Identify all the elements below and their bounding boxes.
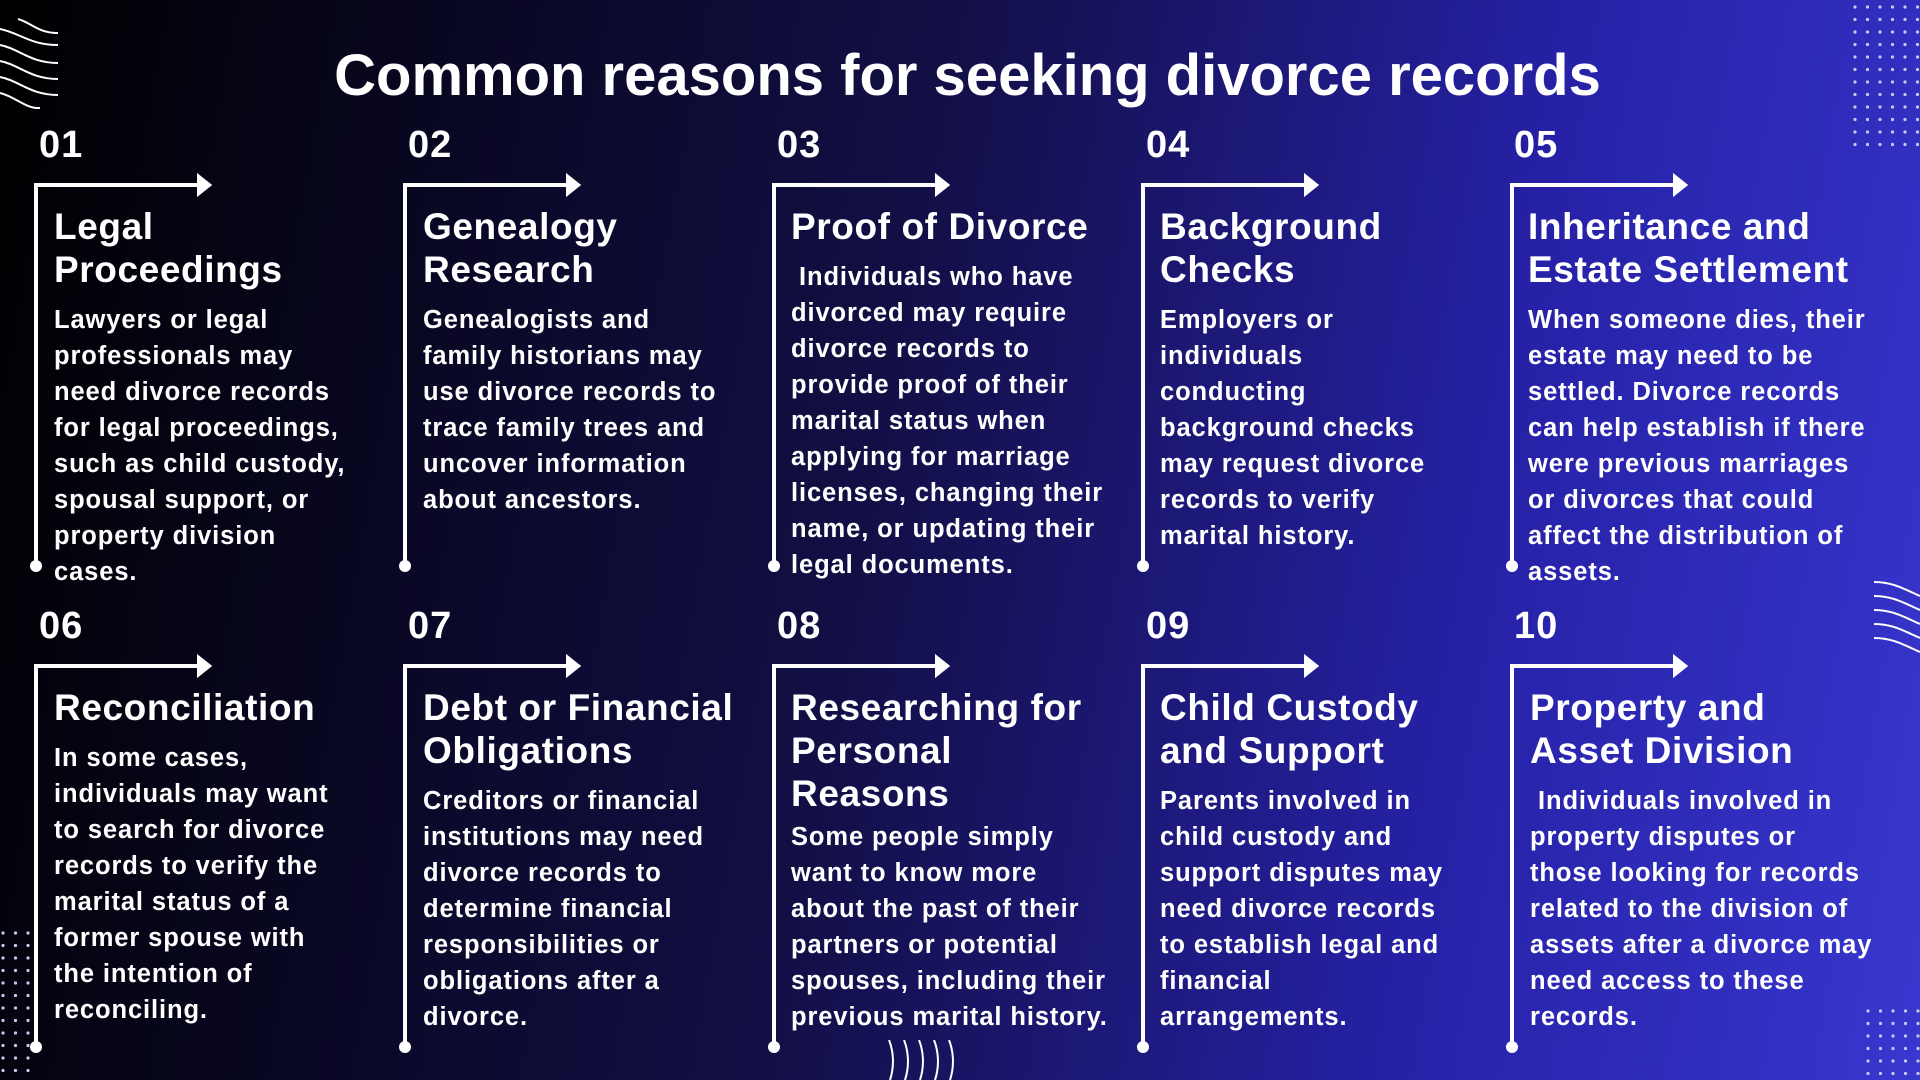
card 02: Genealogy <box>423 206 618 247</box>
card 01: professionals may <box>54 342 293 370</box>
card 02: uncover information <box>423 450 687 478</box>
card 04: conducting <box>1160 378 1306 406</box>
card 07: Creditors or financial <box>423 787 699 815</box>
card 01: Proceedings <box>54 249 283 290</box>
card 02: Research <box>423 249 594 290</box>
card 08: Researching for <box>791 687 1082 728</box>
card 02: Genealogists and <box>423 306 650 334</box>
card 04: individuals <box>1160 342 1303 370</box>
card 10: those looking for records <box>1530 859 1860 887</box>
card 10: records. <box>1530 1003 1638 1031</box>
text: 04 <box>1146 124 1190 166</box>
card 08: about the past of their <box>791 895 1079 923</box>
card 07: institutions may need <box>423 823 704 851</box>
card 02: family historians may <box>423 342 703 370</box>
card 04: may request divorce <box>1160 450 1425 478</box>
card 03: Proof of Divorce <box>791 206 1088 247</box>
card 03: divorce records to <box>791 335 1030 363</box>
card 09: and Support <box>1160 730 1384 771</box>
card 05: assets. <box>1528 558 1621 586</box>
card 03: Individuals who have <box>799 263 1073 291</box>
title: Common reasons for seeking divorce records <box>334 43 1601 108</box>
text: 02 <box>408 124 452 166</box>
numbers: 01 <box>39 124 83 166</box>
card 05: When someone dies, their <box>1528 306 1866 334</box>
card 09: child custody and <box>1160 823 1392 851</box>
card 08: Reasons <box>791 773 949 814</box>
card 01: property division <box>54 522 276 550</box>
card 09: need divorce records <box>1160 895 1436 923</box>
card 06: individuals may want <box>54 780 328 808</box>
card 03: licenses, changing their <box>791 479 1103 507</box>
card 08: Personal <box>791 730 952 771</box>
card 01: Lawyers or legal <box>54 306 268 334</box>
card 07: responsibilities or <box>423 931 660 959</box>
card 09 <box>1160 687 1443 1031</box>
card 06: marital status of a <box>54 888 289 916</box>
card 06: Reconciliation <box>54 687 315 728</box>
decoration: waves right <box>1874 581 1920 653</box>
card 06 <box>54 687 328 1024</box>
card 09: Child Custody <box>1160 687 1419 728</box>
card 05 <box>1528 206 1866 586</box>
text: 05 <box>1514 124 1558 166</box>
card 08: want to know more <box>791 859 1037 887</box>
card 10: need access to these <box>1530 967 1805 995</box>
card 01: need divorce records <box>54 378 330 406</box>
card 09: Parents involved in <box>1160 787 1411 815</box>
card 03: provide proof of their <box>791 371 1069 399</box>
card 10: assets after a divorce may <box>1530 931 1872 959</box>
card 10 <box>1530 687 1872 1031</box>
card 01 <box>54 206 345 586</box>
decoration: dot grid bottom-left <box>1 931 30 1072</box>
card 06: records to verify the <box>54 852 318 880</box>
card 09: financial <box>1160 967 1272 995</box>
card 04: Background <box>1160 206 1382 247</box>
card 04: marital history. <box>1160 522 1355 550</box>
card 04: Checks <box>1160 249 1295 290</box>
card 06: to search for divorce <box>54 816 325 844</box>
card 04 <box>1160 206 1425 550</box>
card 10: related to the division of <box>1530 895 1848 923</box>
card 05: were previous marriages <box>1528 450 1849 478</box>
card 07: Obligations <box>423 730 633 771</box>
card 08: spouses, including their <box>791 967 1106 995</box>
card 06: reconciling. <box>54 996 208 1024</box>
card 05: Inheritance and <box>1528 206 1810 247</box>
decoration: curves bottom <box>888 1040 954 1080</box>
card 01: for legal proceedings, <box>54 414 339 442</box>
card 01: spousal support, or <box>54 486 309 514</box>
card 04: records to verify <box>1160 486 1375 514</box>
card 06: In some cases, <box>54 744 248 772</box>
decoration: dot grid bottom-right <box>1866 1009 1920 1076</box>
text: 07 <box>408 605 452 647</box>
card 08: partners or potential <box>791 931 1058 959</box>
card 04: background checks <box>1160 414 1415 442</box>
decoration: waves top-left <box>0 18 58 109</box>
card 01: such as child custody, <box>54 450 345 478</box>
card 03 <box>791 206 1103 579</box>
card 03: applying for marriage <box>791 443 1071 471</box>
card 07: Debt or Financial <box>423 687 733 728</box>
text: 09 <box>1146 605 1190 647</box>
card 02: trace family trees and <box>423 414 705 442</box>
card 10: Asset Division <box>1530 730 1793 771</box>
card 07: divorce records to <box>423 859 662 887</box>
card 06: the intention of <box>54 960 253 988</box>
card 03: name, or updating their <box>791 515 1095 543</box>
card 09: support disputes may <box>1160 859 1443 887</box>
text: 10 <box>1514 605 1558 647</box>
card 09: arrangements. <box>1160 1003 1347 1031</box>
card 07: determine financial <box>423 895 673 923</box>
card 10: property disputes or <box>1530 823 1796 851</box>
card 10: Individuals involved in <box>1538 787 1832 815</box>
card 07: obligations after a <box>423 967 660 995</box>
card 10: Property and <box>1530 687 1765 728</box>
card 02: about ancestors. <box>423 486 641 514</box>
card 06: former spouse with <box>54 924 305 952</box>
card 01: Legal <box>54 206 154 247</box>
card 05: Estate Settlement <box>1528 249 1849 290</box>
card 08: previous marital history. <box>791 1003 1108 1031</box>
decoration: dot grid top-right <box>1853 5 1920 146</box>
card 01: cases. <box>54 558 137 586</box>
card 05: affect the distribution of <box>1528 522 1843 550</box>
card 05: can help establish if there <box>1528 414 1865 442</box>
card 03: marital status when <box>791 407 1046 435</box>
card 04: Employers or <box>1160 306 1334 334</box>
card 05: estate may need to be <box>1528 342 1813 370</box>
card 02: use divorce records to <box>423 378 716 406</box>
card 07: divorce. <box>423 1003 528 1031</box>
card 08 <box>790 687 1108 1031</box>
card 09: to establish legal and <box>1160 931 1439 959</box>
card 05: or divorces that could <box>1528 486 1814 514</box>
card 05: settled. Divorce records <box>1528 378 1840 406</box>
card 08: Some people simply <box>791 823 1054 851</box>
card 03: legal documents. <box>791 551 1014 579</box>
text: 06 <box>39 605 83 647</box>
card 03: divorced may require <box>791 299 1067 327</box>
text: 08 <box>777 605 821 647</box>
card 07 <box>423 687 733 1031</box>
text: 03 <box>777 124 821 166</box>
card 02 <box>423 206 716 514</box>
